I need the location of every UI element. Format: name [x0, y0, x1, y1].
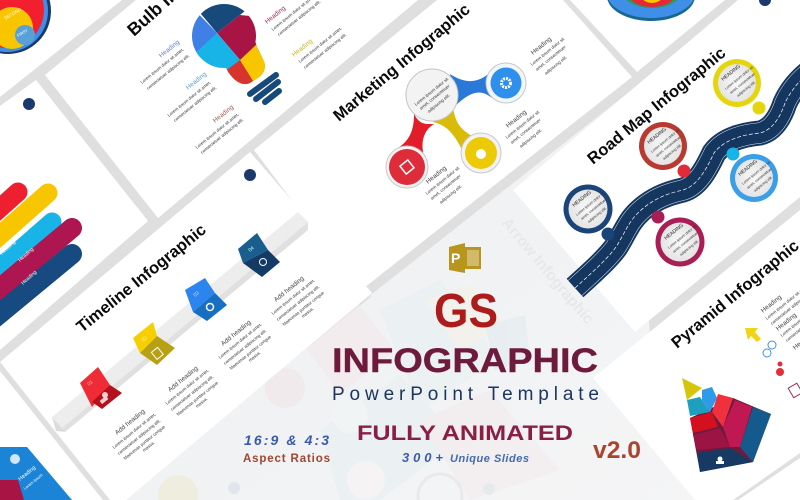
panel: marketing slide: Lorem ipsum dolor sit — [413, 76, 450, 107]
faint heading: Arrow Infographic: Arrow Infographic — [498, 215, 597, 328]
node: blue gear — [486, 63, 526, 103]
panel: top-left concentric slide — [0, 0, 122, 97]
text blocks: marketing: Heading — [505, 109, 528, 130]
connector: red — [398, 114, 434, 156]
text blocks: bulb: Heading — [291, 38, 314, 59]
text blocks: timeline: Lorem ipsum dolor sit amet, — [270, 278, 316, 316]
panel: central faded slide — [118, 85, 710, 500]
text blocks: timeline: Maecenas porttitor congue — [281, 290, 325, 327]
panel: lower-left arrow slide: Lorem ipsum — [22, 472, 44, 491]
panel: bulb slide — [45, 0, 418, 218]
stop: blue: adipiscing elit. — [753, 175, 774, 193]
text blocks: pyramid: Heading — [760, 294, 783, 315]
stop: navy: adipiscing elit. — [587, 206, 608, 224]
step 04: 04 — [247, 245, 256, 254]
stop: crimson: amet, consectetuer — [672, 230, 700, 254]
step 02 — [133, 322, 175, 365]
stop: red: Lorem ipsum dolor sit — [650, 128, 680, 154]
step 01 — [80, 367, 122, 409]
text blocks: marketing: adipiscing elit. — [543, 55, 568, 76]
text blocks: marketing: adipiscing elit. — [518, 128, 543, 149]
timeline track — [52, 212, 308, 432]
icon: bike — [763, 341, 776, 357]
text blocks: bulb: consectetuer adipiscing elit. — [199, 117, 245, 155]
stop: red — [639, 122, 690, 178]
node: centre circle — [406, 69, 458, 121]
text: aspect ratios: Aspect Ratios — [243, 453, 330, 465]
text blocks: timeline: Lorem ipsum dolor sit amet, — [164, 368, 210, 406]
stop: red: HEADING — [646, 126, 668, 146]
icon: gears — [776, 362, 784, 376]
step 03: 03 — [192, 290, 201, 299]
stop: red: amet, consectetuer — [655, 134, 683, 158]
text blocks: bulb: Heading — [264, 5, 287, 26]
panel: road map slide — [513, 0, 800, 332]
step 02: 02 — [140, 335, 149, 344]
text blocks: bulb: Lorem ipsum dolor sit amet, — [194, 112, 240, 150]
text blocks: timeline — [111, 275, 325, 461]
stop: yellow: Lorem ipsum dolor sit — [724, 65, 754, 91]
text blocks: bulb: Heading — [158, 39, 181, 60]
panel: pyramid slide — [593, 210, 800, 500]
stop: blue: amet, consectetuer — [746, 166, 774, 190]
icon: puzzle bulb — [192, 4, 266, 84]
text blocks: marketing: Heading — [425, 165, 448, 186]
panel: top pie slide — [570, 0, 725, 72]
panel: left stacked bars slide: Heading — [17, 246, 35, 263]
text blocks: marketing: Lorem ipsum dolor sit — [529, 36, 566, 67]
connector: blue — [450, 70, 492, 106]
stop: blue: Lorem ipsum dolor sit — [741, 160, 771, 186]
text blocks: marketing — [424, 36, 568, 205]
heading: GS: GS — [434, 285, 498, 338]
stop: red: adipiscing elit. — [662, 143, 683, 161]
stop: navy: Lorem ipsum dolor sit — [575, 191, 605, 217]
step 01: 01 — [86, 379, 95, 388]
node: yellow cloud — [461, 133, 501, 173]
text blocks: bulb: Heading — [212, 104, 235, 125]
stop: yellow — [713, 59, 766, 114]
text blocks: timeline: massa. — [194, 396, 209, 409]
title: marketing: Marketing Infographic — [330, 0, 474, 125]
text blocks: marketing: Lorem ipsum dolor sit — [504, 109, 541, 140]
road — [575, 66, 800, 288]
text blocks: timeline: Lorem ipsum dolor sit amet, — [111, 412, 157, 450]
stop: navy — [564, 184, 614, 240]
panel: top-left concentric slide: FIRST — [16, 27, 29, 38]
stop: crimson: HEADING — [663, 222, 685, 242]
subheading: PowerPoint Template: PowerPoint Template — [332, 384, 599, 405]
text: 300+ Unique Slides: Unique Slides — [450, 453, 529, 465]
text blocks: timeline: Maecenas porttitor congue — [228, 334, 272, 371]
text blocks: bulb: Lorem ipsum dolor sit amet, — [297, 26, 343, 64]
text blocks: timeline: consectetuer adipiscing elit. — [169, 374, 215, 412]
text blocks: bulb: Lorem ipsum dolor sit amet, — [166, 80, 212, 118]
text blocks: timeline: consectetuer adipiscing elit. — [275, 284, 321, 322]
heading: INFOGRAPHIC: INFOGRAPHIC — [332, 342, 598, 380]
text blocks: timeline: Add heading — [273, 275, 306, 304]
panel: left stacked bars slide — [0, 80, 148, 350]
icon: document — [788, 383, 800, 398]
text blocks: bulb: consectetuer adipiscing elit. — [172, 85, 218, 123]
stop: yellow: adipiscing elit. — [736, 80, 757, 98]
connector: yellow — [433, 108, 472, 152]
text: 300+ Unique Slides — [402, 450, 529, 465]
pyramid chart — [682, 378, 771, 472]
stop: blue — [726, 148, 778, 202]
text blocks: timeline: Add heading — [220, 319, 253, 348]
text blocks: timeline: consectetuer adipiscing elit. — [116, 418, 162, 456]
icon: bulb base — [250, 75, 279, 102]
panel: marketing slide: amet, consectetuer — [418, 83, 451, 111]
panel: top-left concentric slide: SECOND — [3, 7, 23, 21]
text blocks: bulb: consectetuer adipiscing elit. — [276, 0, 322, 37]
text blocks: marketing: amet, consectetuer — [429, 173, 462, 201]
text blocks: marketing: adipiscing elit. — [438, 184, 463, 205]
panel: timeline slide — [0, 152, 372, 500]
text: 300+ Unique Slides: 300+ — [402, 450, 443, 465]
icon: PowerPoint logo: P — [451, 250, 460, 266]
node: red picture — [386, 146, 428, 188]
stop: crimson: adipiscing elit. — [679, 239, 700, 257]
stop: navy: amet, consectetuer — [580, 197, 608, 221]
icon: yellow arrow — [745, 328, 761, 342]
panel: marketing slide — [254, 0, 632, 291]
text blocks: marketing: Heading — [530, 36, 553, 57]
text blocks: bulb: consectetuer adipiscing elit. — [145, 53, 191, 91]
text blocks: bulb: Heading — [185, 71, 208, 92]
text blocks: bulb: Lorem ipsum dolor sit amet, — [139, 47, 185, 85]
stop: crimson — [652, 210, 704, 266]
step 03 — [185, 278, 227, 321]
text blocks: marketing: amet, consectetuer — [534, 44, 567, 72]
panel: lower-left arrow slide: Heading — [17, 465, 37, 483]
stop: yellow: amet, consectetuer — [729, 71, 757, 95]
stop: yellow: HEADING — [720, 63, 742, 83]
stop: navy: HEADING — [571, 189, 593, 209]
text blocks: bulb — [139, 0, 348, 155]
text blocks: timeline: massa. — [300, 306, 315, 319]
text blocks: pyramid: Heading — [775, 312, 798, 333]
panel: lower-left arrow slide — [0, 371, 103, 500]
text blocks: marketing: amet, consectetuer — [509, 117, 542, 145]
text: aspect ratios: 16:9 & 4:3 — [244, 432, 329, 448]
text blocks: timeline: massa. — [141, 440, 156, 453]
text blocks: timeline: Add heading — [114, 408, 147, 437]
stop: blue: HEADING — [737, 158, 759, 178]
title: timeline: Timeline Infographic — [73, 221, 210, 336]
text blocks: pyramid — [760, 283, 800, 352]
text blocks: timeline: Lorem ipsum dolor sit amet, — [217, 322, 263, 360]
text blocks: timeline: consectetuer adipiscing elit. — [222, 328, 268, 366]
text blocks: timeline: Maecenas porttitor congue — [175, 380, 219, 417]
text blocks: timeline: Add heading — [167, 365, 200, 394]
text blocks: marketing: Lorem ipsum dolor sit — [424, 165, 461, 196]
step 04 — [238, 233, 280, 277]
text: aspect ratios — [243, 432, 330, 465]
text blocks: timeline: Maecenas porttitor congue — [122, 424, 166, 461]
text blocks: timeline: massa. — [247, 350, 262, 363]
icon: PowerPoint logo — [449, 243, 481, 273]
panel: left stacked bars slide: Heading — [20, 269, 38, 286]
title: pyramid: Pyramid Infographic — [668, 237, 800, 352]
heading: FULLY ANIMATED: FULLY ANIMATED — [357, 422, 573, 445]
panel: marketing slide: adipiscing elit. — [426, 93, 451, 114]
title: road map: Road Map Infographic — [584, 44, 729, 168]
stop: crimson: Lorem ipsum dolor sit — [667, 224, 697, 250]
text blocks: bulb: consectetuer adipiscing elit. — [302, 32, 348, 70]
text: version: v2.0 — [593, 437, 641, 464]
